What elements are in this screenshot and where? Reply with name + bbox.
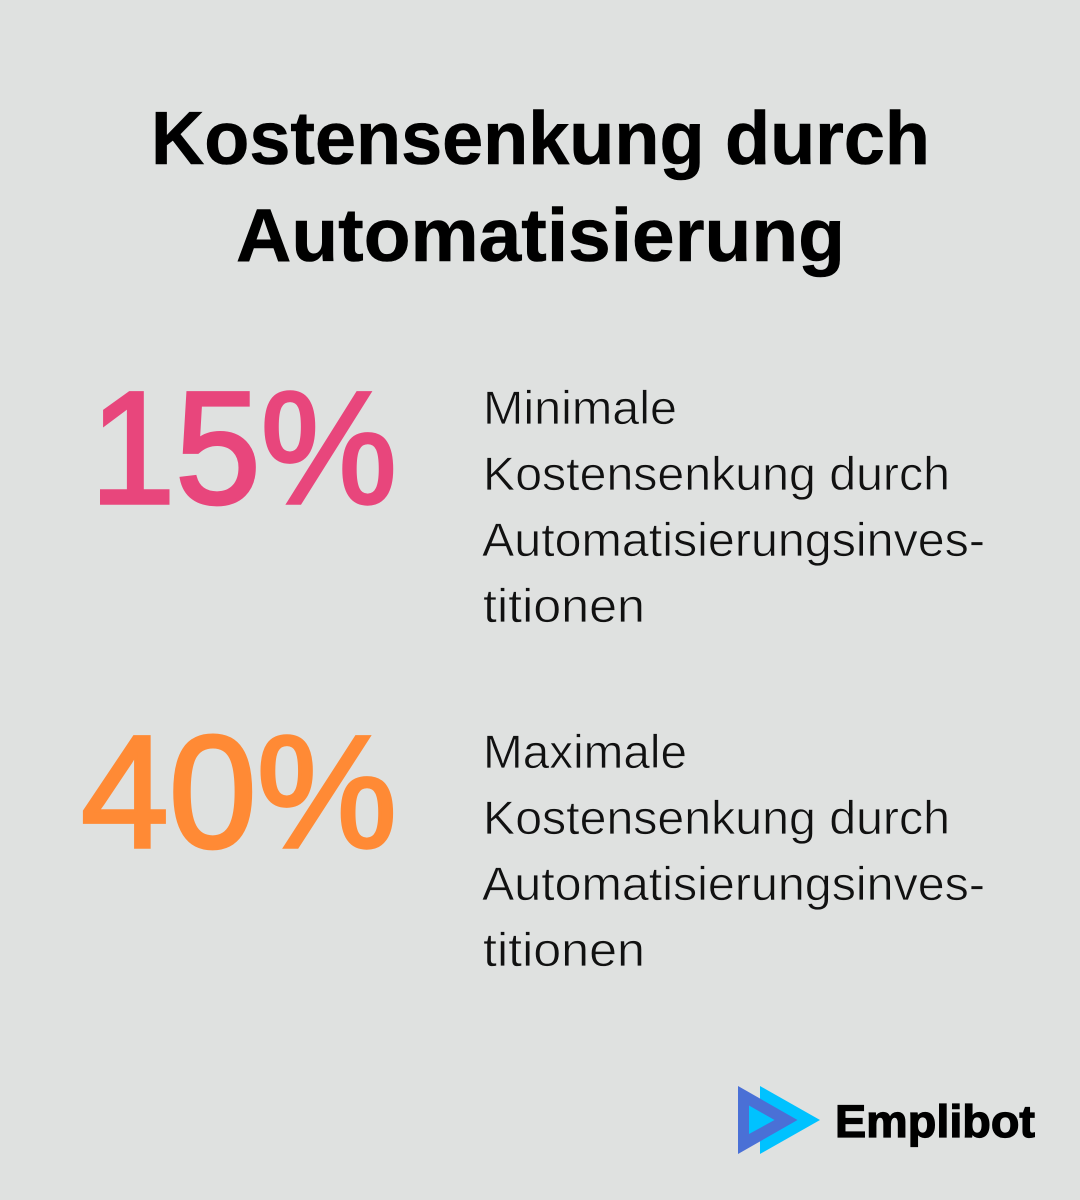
description: Minimale Kostensenkung: titionen <box>483 579 645 632</box>
logo: Emplibot <box>738 1086 1035 1154</box>
description: Maximale Kostensenkung: Automatisierungsinves- <box>482 857 985 910</box>
icon: play triangles <box>738 1086 820 1154</box>
description: Minimale Kostensenkung: Automatisierungsinves- <box>482 513 985 566</box>
number: 40%: 40% <box>81 702 397 881</box>
description: Minimale Kostensenkung <box>482 381 985 632</box>
title: Automatisierung <box>236 193 845 277</box>
description: Minimale Kostensenkung: Kostensenkung durch <box>483 447 950 500</box>
description: Maximale Kostensenkung: Maximale <box>483 725 687 778</box>
description: Minimale Kostensenkung: Minimale <box>483 381 677 434</box>
description: Maximale Kostensenkung: titionen <box>483 923 645 976</box>
wordmark: Emplibot <box>835 1096 1035 1147</box>
description: Maximale Kostensenkung <box>482 725 985 976</box>
stat: 15% <box>90 358 985 632</box>
title <box>151 96 930 277</box>
number: 15%: 15% <box>90 358 397 537</box>
stat: 40% <box>81 702 985 976</box>
title: Kostensenkung durch <box>151 96 930 180</box>
description: Maximale Kostensenkung: Kostensenkung durch <box>483 791 950 844</box>
